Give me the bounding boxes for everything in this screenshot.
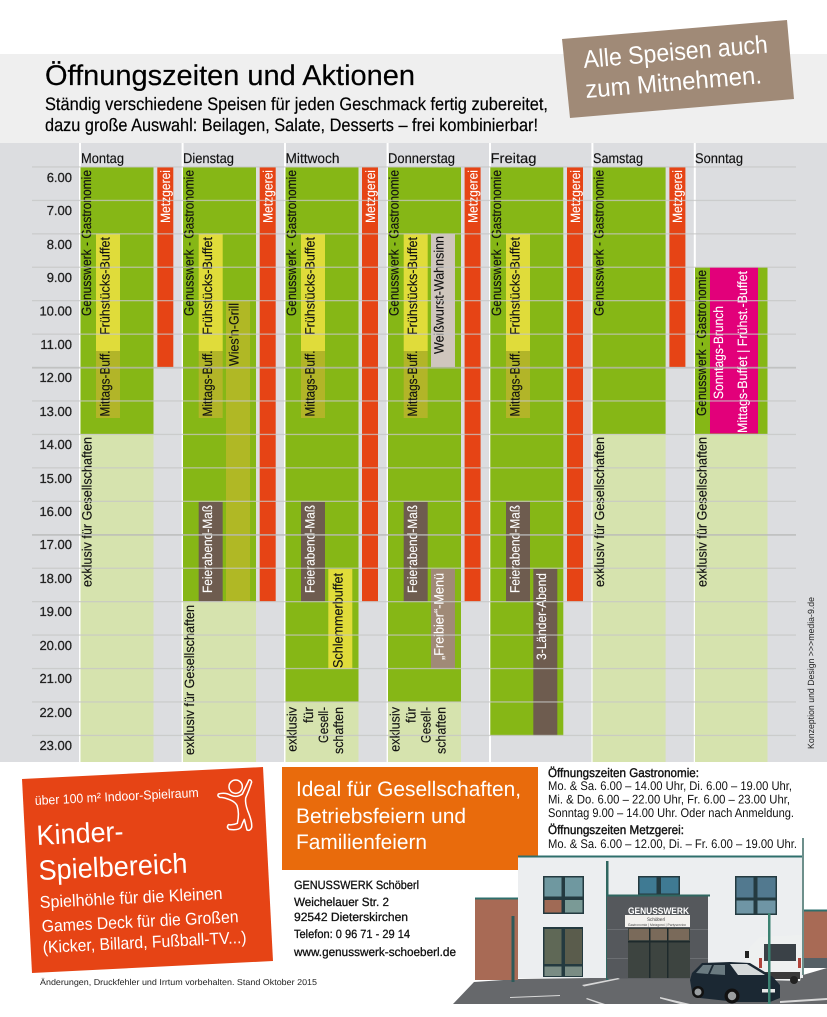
subtitle: dazu große Auswahl: Beilagen, Salate, Desserts – frei kombinierbar! [45,115,538,135]
column: Sonntag: Sonntags-Brunch [711,306,726,399]
column: Sonntag [694,150,768,762]
column: Donnerstag: Frühstücks-Buffet [405,237,420,335]
column: Mittwoch [284,150,378,762]
entrance sign: GENUSSWERK [628,906,689,917]
hour labels: 9.00 [47,270,72,285]
subtitle: Ständig verschiedene Speisen für jeden Geschmack fertig zubereitet, [45,94,548,114]
column: Samstag [592,150,685,762]
column: Montag [79,150,173,762]
callout: Alle Speisen auch zum Mitnehmen: zum Mitnehmen. [584,61,763,104]
column: Montag: Mittags-Buff. [97,350,112,416]
text block: opening hours: Öffnungszeiten Gastronomie: [548,766,699,780]
text block: opening hours [548,766,797,851]
hour labels: 7.00 [47,203,72,218]
text block: address: Telefon: 0 96 71 - 29 14 [294,927,410,941]
column: Donnerstag: für [404,706,419,723]
column: Samstag: Samstag [593,150,643,166]
hour labels: 11.00 [40,337,72,352]
photo: Genusswerk building [453,838,827,1004]
column: Mittwoch: Frühstücks-Buffet [302,237,317,335]
panel: Kinder-Spielbereich [22,767,273,973]
column: Donnerstag: Genusswerk - Gastronomie [386,170,402,316]
hour labels: 10.00 [39,304,72,318]
hour labels: 16.00 [39,504,72,519]
credit: design: Konzeption und Design >>>media-9.de [806,597,816,749]
hour labels [39,170,72,753]
column: Samstag: exklusiv für Gesellschaften [592,437,607,587]
hour labels: 21.00 [39,671,72,686]
column: Dienstag: Metzgerei [260,170,276,223]
hour labels: 18.00 [39,571,72,586]
entrance sign [625,906,690,927]
panel: Kinder-Spielbereich: Spielbereich [38,848,188,886]
column: Dienstag: Wies'n-Grill [227,303,242,366]
column: Dienstag: Mittags-Buff. [200,350,215,416]
hour labels: 17.00 [39,537,72,552]
hour labels: 23.00 [39,738,72,753]
column: Freitag: Genusswerk - Gastronomie [489,170,504,316]
panel: Ideal für Gesellschaften: Betriebsfeiern und [296,805,466,828]
column: Mittwoch: Gesell- [316,707,331,743]
hour labels: 14.00 [39,437,72,452]
column: Freitag: Mittags-Buff. [507,350,522,416]
column: Mittwoch: schaften [331,707,346,754]
text block: address: Weichelauer Str. 2 [294,895,389,909]
column: Donnerstag: Metzgerei [465,170,480,223]
column: Freitag [489,150,583,736]
callout: Alle Speisen auch zum Mitnehmen: Alle Speisen auch [582,31,769,74]
column: Mittwoch: Mittags-Buff. [302,350,317,416]
column: Donnerstag: Donnerstag [388,150,455,166]
column: Mittwoch: Genusswerk - Gastronomie [284,170,299,316]
column: Montag: exklusiv für Gesellschaften [80,437,94,587]
panel: Kinder-Spielbereich: Games Deck für die Großen [41,907,239,936]
column: Dienstag [182,150,276,762]
column: Freitag: Metzgerei [568,170,583,223]
text block: opening hours: Sonntag 9.00 – 14.00 Uhr. Oder nach Anmeldung. [548,806,794,820]
icon: jumping child [218,780,252,830]
callout: Alle Speisen auch zum Mitnehmen [562,20,794,118]
column: Sonntag: Genusswerk - Gastronomie [694,270,709,416]
entrance sign: Schöberl [647,917,665,923]
subtitle [45,94,548,135]
column: Mittwoch: Mittwoch [286,150,340,166]
title: Öffnungszeiten und Aktionen [45,60,415,92]
column: Donnerstag: Weißwurst-Wahnsinn [431,236,446,354]
windows [543,876,777,977]
text block: address: GENUSSWERK Schöberl [294,878,419,892]
column: Montag: Metzgerei [158,170,173,223]
column: Dienstag: Genusswerk - Gastronomie [182,170,196,316]
hour labels: 20.00 [39,638,72,653]
column: Dienstag: Dienstag [183,150,234,166]
hour labels: 12.00 [39,370,72,385]
column: Sonntag: Sonntag [695,150,743,166]
column: Mittwoch: Metzgerei [363,170,378,223]
column: Mittwoch: exklusiv [285,707,300,752]
column: Sonntag: Mittags-Buffet | Frühst.-Buffet [735,271,750,433]
text block: opening hours: Mo. & Sa. 6.00 – 14.00 Uhr, Di. 6.00 – 19.00 Uhr, [548,779,792,793]
column: Freitag: 3-Länder-Abend [534,573,549,660]
column: Montag: Genusswerk - Gastronomie [79,170,94,316]
column: Montag: Frühstücks-Buffet [97,237,112,335]
panel: Kinder-Spielbereich: über 100 m² Indoor-Spielraum [34,785,199,808]
text block: address [293,878,456,959]
entrance sign: Gastronomie | Metzgerei | Partyservice [628,923,686,927]
van [745,935,802,984]
text block: opening hours: Mo. & Sa. 6.00 – 12.00, Di. – Fr. 6.00 – 19.00 Uhr. [548,837,797,851]
column: Dienstag: Frühstücks-Buffet [200,237,215,335]
hour labels: 19.00 [39,604,72,619]
panel: Ideal für Gesellschaften: Familienfeiern [296,831,427,854]
hour labels: 22.00 [39,705,72,720]
panel: weekly schedule [0,143,827,762]
column: Samstag: Genusswerk - Gastronomie [592,170,606,316]
column: Freitag: Feierabend-Maß [507,505,522,593]
car [690,962,780,1004]
ground [453,968,827,1004]
hour labels: 15.00 [39,471,72,486]
panel: Kinder-Spielbereich: Kinder- [36,816,124,851]
column: Donnerstag: Gesell- [419,707,434,743]
panel: Kinder-Spielbereich: Spielhöhle für die Kleinen [39,884,223,912]
column: Donnerstag: Feierabend-Maß [405,505,420,593]
hour labels: 8.00 [47,237,72,252]
column: Freitag: Freitag [490,150,536,166]
column: Samstag: Metzgerei [670,170,685,223]
entrance glass [628,928,690,978]
hour labels: 6.00 [47,170,72,185]
column: Freitag: Frühstücks-Buffet [507,237,522,335]
footnote: Änderungen, Druckfehler und Irrtum vorbehalten. Stand Oktober 2015 [40,977,317,987]
column: Dienstag: exklusiv für Gesellschaften [182,605,197,755]
panel: Ideal für Gesellschaften: Ideal für Gesellschaften, [296,778,521,801]
text block: address: www.genusswerk-schoeberl.de [293,945,456,959]
column: Mittwoch: für [301,706,316,723]
column: Donnerstag: schaften [434,707,449,754]
text block: opening hours: Mi. & Do. 6.00 – 22.00 Uhr, Fr. 6.00 – 23.00 Uhr, [548,792,790,806]
column: Donnerstag [386,150,481,762]
text block: opening hours: Öffnungszeiten Metzgerei: [548,823,684,837]
column: Donnerstag: Mittags-Buff. [405,350,420,416]
panel: Ideal für Gesellschaften [282,767,538,870]
column: Donnerstag: „Freibier“-Menü [431,573,446,660]
header band [0,54,827,143]
column: Donnerstag: exklusiv [387,707,402,752]
parking markings [510,978,827,1004]
panel: Kinder-Spielbereich: (Kicker, Billard, Fußball-TV...) [42,928,247,957]
hour labels: 13.00 [39,404,72,419]
column: Sonntag: exklusiv für Gesellschaften [694,437,710,587]
text block: address: 92542 Dieterskirchen [294,910,408,924]
column: Mittwoch: Schlemmerbuffet [331,573,346,668]
column: Montag: Montag [81,150,124,166]
column: Dienstag: Feierabend-Maß [200,505,215,593]
column: Mittwoch: Feierabend-Maß [302,505,317,593]
